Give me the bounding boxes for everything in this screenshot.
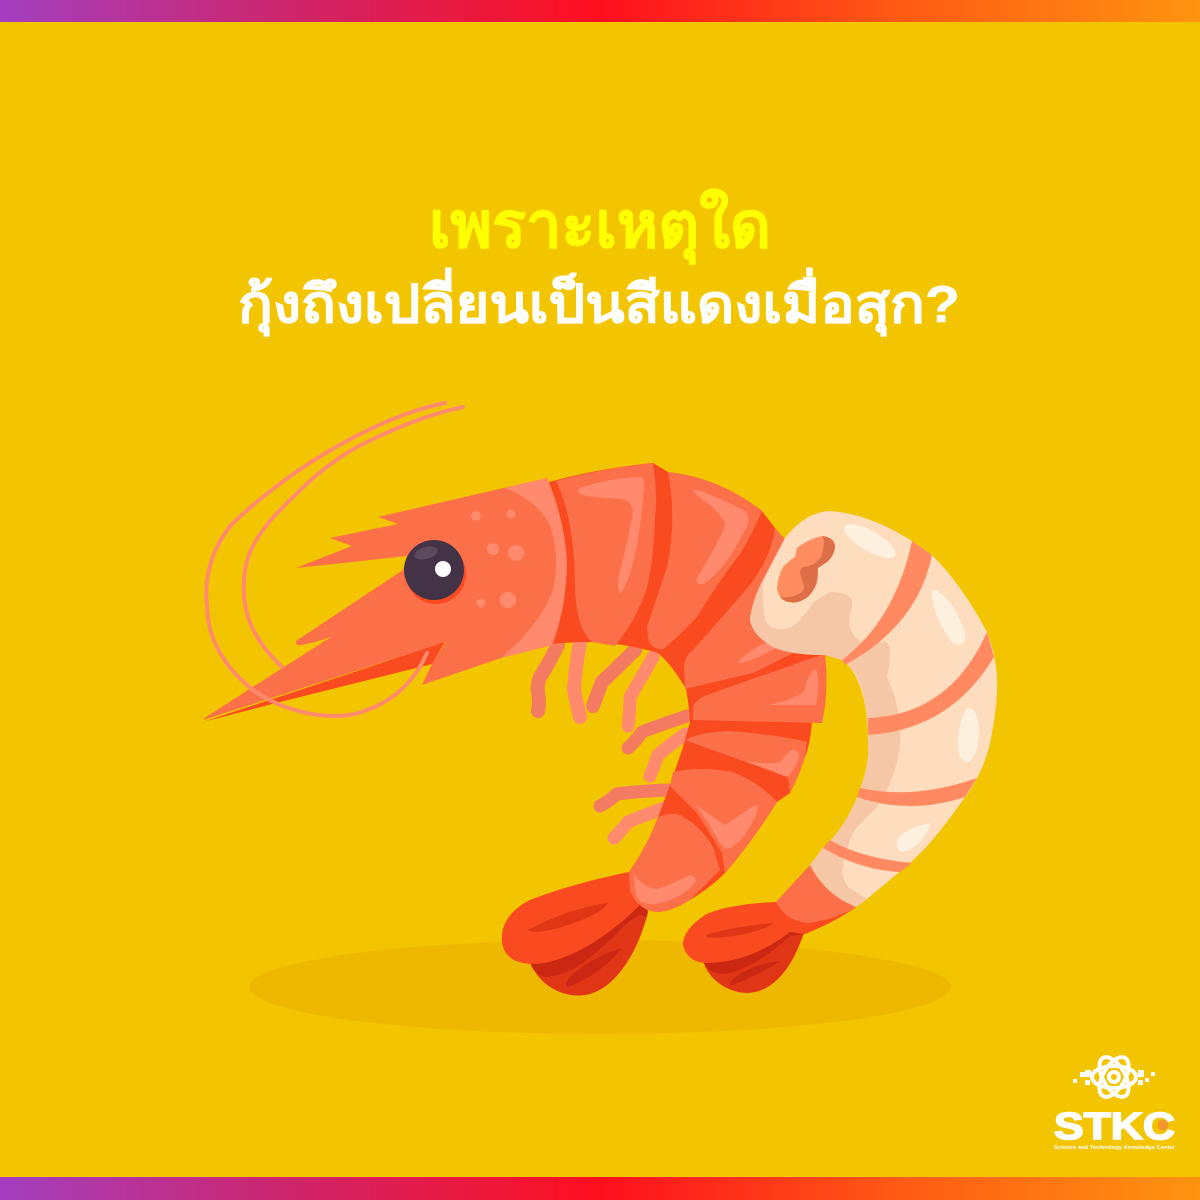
- logo wordmark: STKC: [1054, 1106, 1175, 1148]
- logo pixels: [1073, 1070, 1155, 1085]
- shell base: [549, 463, 826, 912]
- beak dark stripe: [203, 642, 445, 722]
- shell highlights: [578, 477, 818, 904]
- shrimp legs: [538, 643, 687, 838]
- orange tail base: [776, 865, 856, 923]
- cream highlights: [840, 518, 900, 564]
- eye: [404, 540, 466, 604]
- logo atom emblem: [1092, 1052, 1136, 1102]
- left tail fan: [502, 872, 648, 996]
- cream bands: [842, 541, 932, 665]
- head collar: [501, 478, 567, 658]
- bottom gradient bar: [0, 1177, 1200, 1200]
- body cut: [777, 536, 835, 602]
- head spots: [471, 510, 524, 608]
- shrimp illustration: [203, 403, 997, 996]
- right tail fan: [683, 880, 856, 993]
- shrimp head: [203, 478, 567, 722]
- shell segments: [556, 463, 826, 912]
- cream peeled body: [750, 511, 997, 907]
- logo dot: [1158, 1120, 1168, 1130]
- antennae: [206, 403, 463, 716]
- title line 2: กุ้งถึงเปลี่ยนเป็นสีแดงเมื่อสุก?: [238, 268, 960, 337]
- logo tagline: Science and Technology Knowledge Center: [1054, 1145, 1176, 1151]
- title line 1: เพราะเหตุใด: [429, 188, 771, 265]
- head shape: [203, 478, 562, 720]
- top gradient bar: [0, 0, 1200, 22]
- shaded body area: [750, 580, 900, 907]
- ground shadow: [249, 940, 951, 1034]
- STKC logo: [1054, 1052, 1176, 1151]
